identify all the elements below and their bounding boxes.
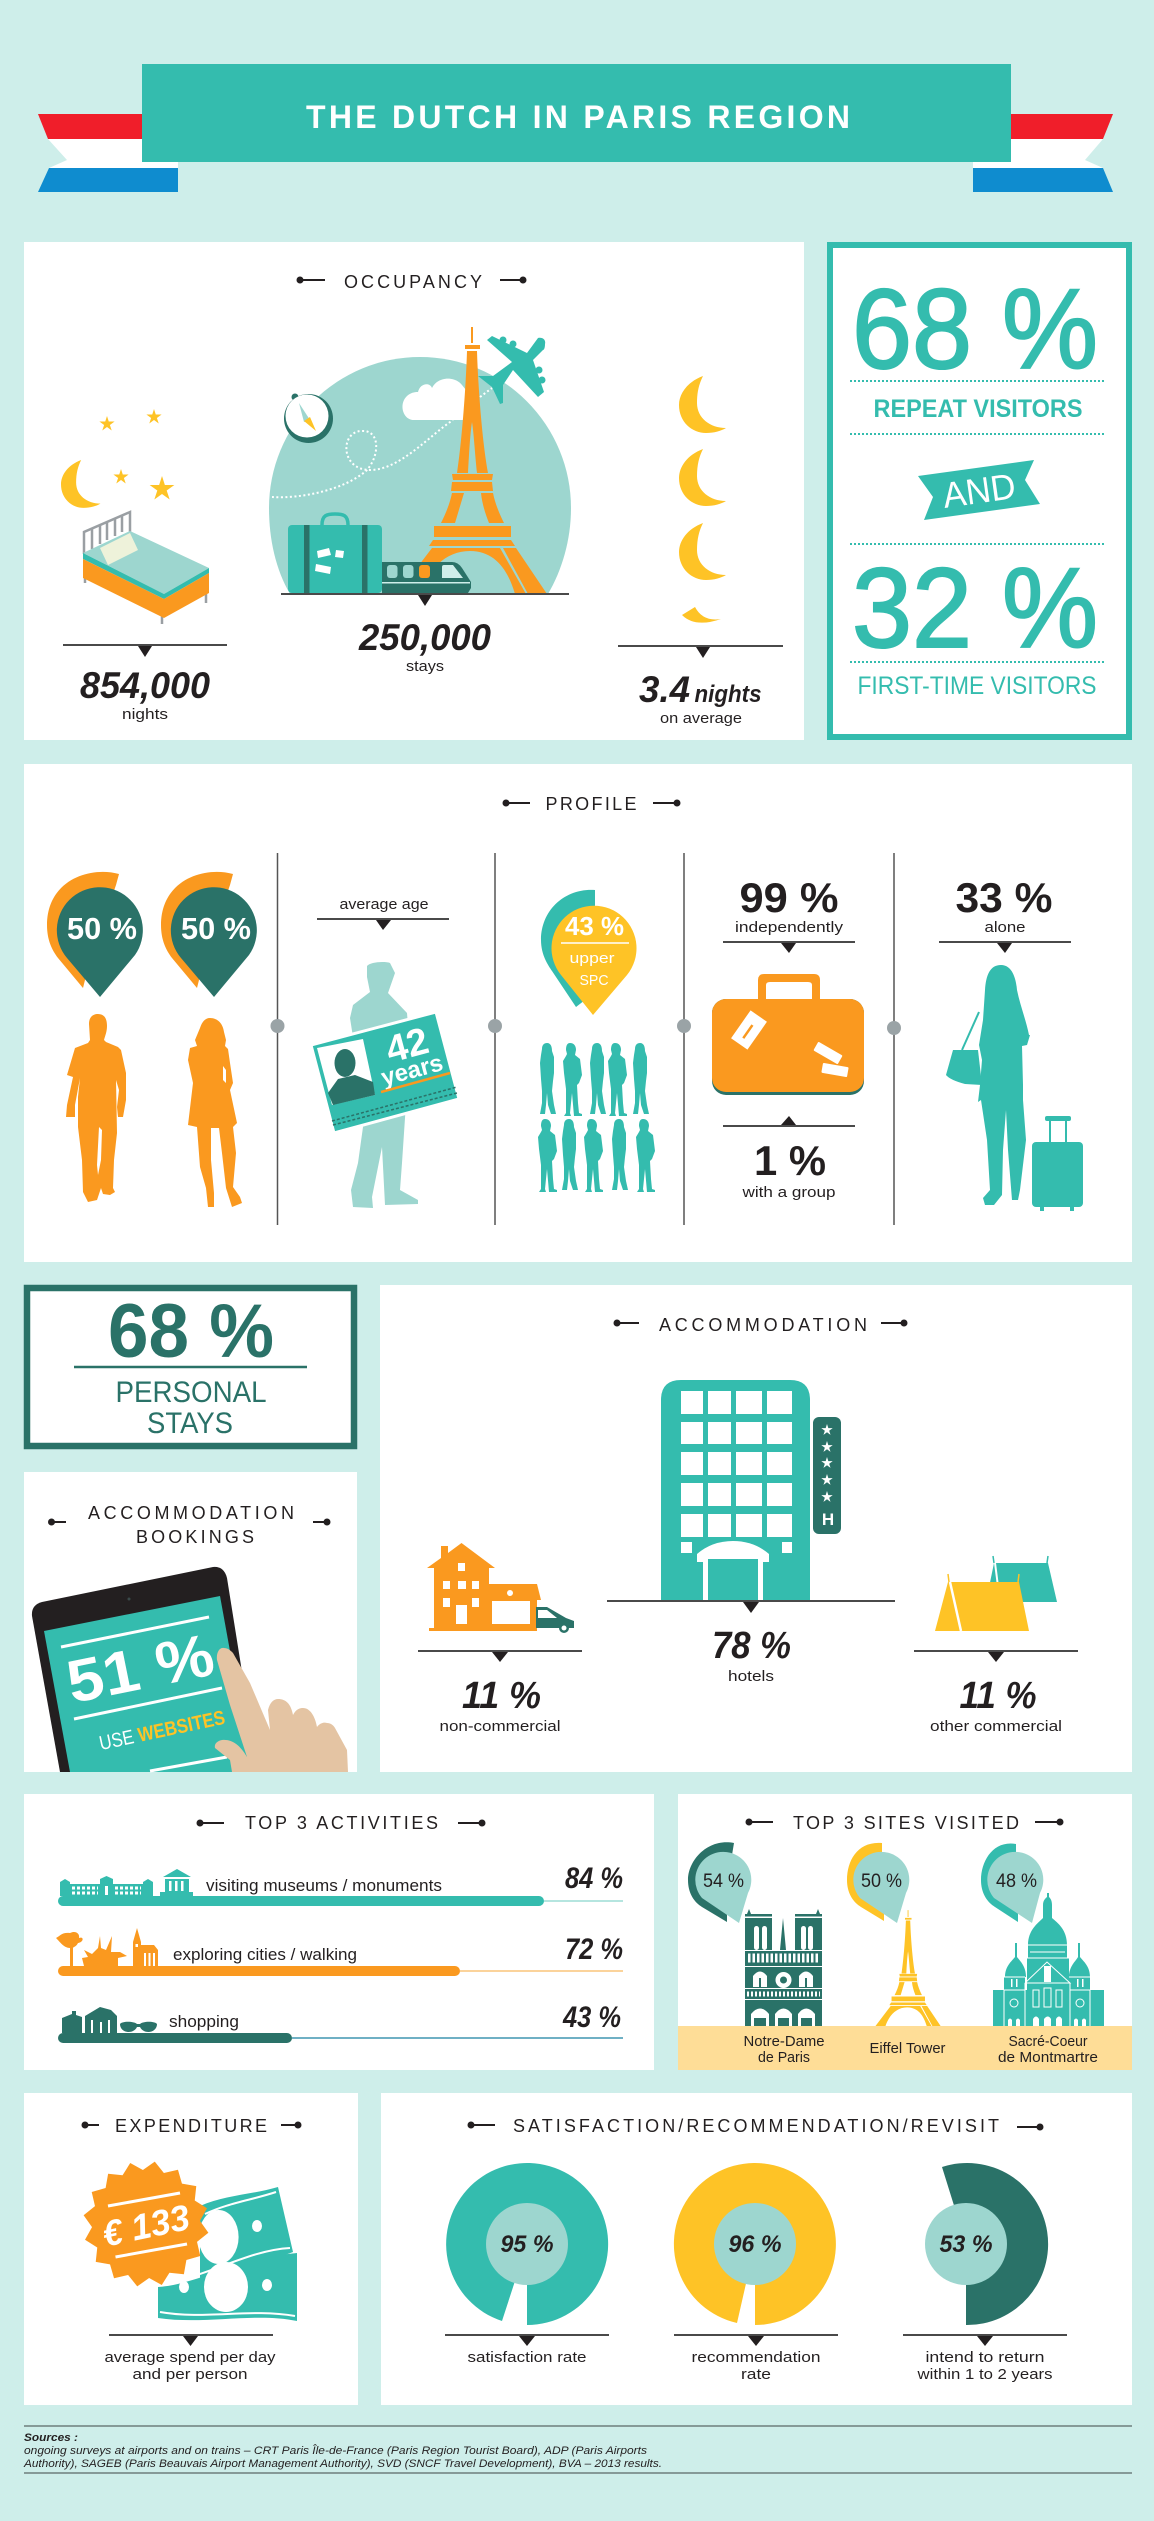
stat: 32 % first-time visitors: FIRST-TIME VISITORS bbox=[858, 672, 1096, 700]
pin: women 50 % bbox=[161, 872, 257, 997]
chart: intend to return 53 %: 53 % bbox=[940, 2231, 992, 2258]
icon: tents bbox=[935, 1555, 1057, 1631]
icon: tablet: USE WEBSITES bbox=[97, 1707, 227, 1755]
bar: shopping 43 %: shopping bbox=[169, 2012, 239, 2031]
pin: upper SPC 43 %: 43 % bbox=[565, 911, 624, 941]
site labels: Sacré-Coeur bbox=[1008, 2033, 1088, 2050]
stat: 78 % hotels: 78 % bbox=[712, 1625, 791, 1667]
chart: satisfaction rate 95 %: 95 % bbox=[500, 2231, 554, 2258]
title banner bbox=[38, 64, 1113, 192]
pin: upper SPC 43 %: SPC bbox=[580, 972, 609, 989]
panel: 68 % personal stays: STAYS bbox=[147, 1407, 233, 1440]
label: average spend: average spend per day bbox=[104, 2349, 276, 2366]
title text: THE DUTCH IN PARIS REGION bbox=[306, 99, 850, 135]
ribbon: and bbox=[918, 460, 1040, 520]
icon: museum and monument bbox=[60, 1869, 193, 1896]
stat: 78 % hotels: hotels bbox=[728, 1668, 774, 1685]
right flag ribbon bbox=[973, 114, 1113, 192]
icon: tablet bbox=[32, 1567, 258, 1772]
label: average spend: and per person bbox=[132, 2366, 248, 2383]
icon: shopping bag, gift and sunglasses bbox=[62, 2007, 157, 2033]
icon: plane bbox=[478, 336, 546, 404]
icon: tablet: 51 % bbox=[61, 1621, 219, 1716]
icon: hotel bbox=[661, 1380, 841, 1601]
stat: 11 % other commercial bbox=[914, 1651, 1078, 1735]
chart: satisfaction rate 95 %: satisfaction rate bbox=[468, 2349, 586, 2366]
chart: recommendation rate 96 % bbox=[674, 2163, 838, 2383]
stat: 3.4 nights on average bbox=[618, 646, 783, 727]
stat: 78 % hotels bbox=[607, 1601, 895, 1685]
icon: orange suitcase bbox=[712, 974, 864, 1095]
panel: top 3 activities bbox=[24, 1794, 654, 2070]
illustration: eiffel tower, plane, suitcase and train bbox=[269, 327, 571, 606]
bar: shopping 43 %: 43 % bbox=[562, 2001, 621, 2034]
chart: recommendation rate 96 %: 96 % bbox=[728, 2231, 782, 2258]
pin: men 50 % bbox=[47, 872, 143, 997]
left flag ribbon bbox=[38, 114, 180, 192]
icon: hotel: H bbox=[822, 1510, 834, 1529]
stat: 250,000 stays: 250,000 bbox=[358, 617, 491, 658]
column dividers bbox=[270, 853, 901, 1225]
sources footnote: ongoing surveys at airports and on trains – CRT Paris Île-de-France (Paris Region Tourist Board), ADP (Paris Airports bbox=[24, 2444, 648, 2457]
chart: recommendation rate 96 %: recommendation bbox=[692, 2349, 820, 2366]
stat: 99 % independently bbox=[723, 874, 855, 953]
pin: sacre-coeur 48 %: 48 % bbox=[996, 1871, 1037, 1892]
icon: hand pointing at tablet bbox=[215, 1648, 348, 1772]
stat: 3.4 nights on average: nights bbox=[694, 681, 762, 708]
stat: 3.4 nights on average: on average bbox=[660, 710, 742, 727]
stat: 11 % other commercial: other commercial bbox=[930, 1718, 1062, 1735]
bar: visiting museums / monuments 84 %: visiting museums / monuments bbox=[206, 1876, 442, 1895]
stat: 3.4 nights on average: 3.4 bbox=[639, 669, 690, 710]
icon: row of moons bbox=[679, 376, 726, 623]
icon: group of people bbox=[538, 1043, 655, 1192]
stat: 11 % non-commercial: non-commercial bbox=[440, 1718, 560, 1735]
icon: woman with bag and trolley bbox=[946, 965, 1083, 1211]
stat: 1 % with a group: 1 % bbox=[754, 1137, 826, 1184]
stat: 68 % repeat visitors: REPEAT VISITORS bbox=[874, 395, 1082, 423]
bar: exploring cities / walking 72 % bbox=[56, 1928, 623, 1976]
icon: moon and stars bbox=[61, 409, 174, 508]
heading: accommodation: ACCOMMODATION bbox=[659, 1315, 867, 1335]
stat: 99 % independently: independently bbox=[735, 919, 844, 936]
bar: exploring cities / walking 72 %: exploring cities / walking bbox=[173, 1945, 357, 1964]
icon: person with age sign bbox=[311, 962, 459, 1208]
heading: profile bbox=[504, 794, 680, 814]
pin: upper SPC 43 %: upper bbox=[570, 950, 614, 967]
heading: occupancy: OCCUPANCY bbox=[344, 272, 482, 292]
panel: occupancy bbox=[24, 242, 804, 740]
pin: women 50 %: 50 % bbox=[181, 911, 251, 946]
stat: 854,000 nights: nights bbox=[122, 706, 168, 723]
pin: men 50 %: 50 % bbox=[67, 911, 137, 946]
icon: train bbox=[382, 562, 471, 593]
stat: 250,000 stays bbox=[358, 617, 491, 675]
sources footnote: Authority), SAGEB (Paris Beauvais Airport Management Authority), SVD (SNCF Travel Development), BVA – 2013 results. bbox=[23, 2458, 662, 2470]
chart: intend to return 53 % bbox=[903, 2163, 1067, 2383]
stat: 250,000 stays: stays bbox=[406, 658, 444, 675]
stat: 33 % alone bbox=[939, 874, 1071, 953]
badge: 133 euros: € 133 bbox=[99, 2196, 193, 2255]
panel: 68 % personal stays: PERSONAL bbox=[116, 1376, 266, 1409]
average age label bbox=[317, 896, 449, 930]
chart: intend to return 53 %: intend to return bbox=[926, 2349, 1044, 2366]
stat: 11 % other commercial: 11 % bbox=[960, 1675, 1036, 1717]
panel: accommodation bookings bbox=[24, 1472, 357, 1772]
stat: 1 % with a group bbox=[723, 1116, 855, 1201]
stat: 33 % alone: alone bbox=[984, 919, 1026, 936]
bar: shopping 43 % bbox=[58, 2001, 623, 2043]
panel: expenditure bbox=[24, 2093, 358, 2405]
heading: accommodation bookings bbox=[49, 1503, 330, 1547]
icon: sacre-coeur bbox=[993, 1893, 1104, 2026]
site labels: de Montmartre bbox=[998, 2049, 1098, 2066]
site labels: de Paris bbox=[758, 2049, 810, 2066]
icon: tree, grass and church bbox=[56, 1928, 158, 1966]
heading: profile: PROFILE bbox=[546, 794, 636, 814]
icon: person with age sign: 42 bbox=[381, 1020, 433, 1072]
stat: 854,000 nights bbox=[63, 645, 227, 723]
pin: sacre-coeur 48 % bbox=[981, 1843, 1043, 1923]
pin: notre-dame 54 %: 54 % bbox=[703, 1871, 744, 1892]
panel: 68 % personal stays: 68 % bbox=[108, 1289, 274, 1374]
sources footnote bbox=[23, 2426, 1132, 2473]
stat: 33 % alone: 33 % bbox=[956, 874, 1052, 921]
pin: eiffel tower 50 %: 50 % bbox=[861, 1871, 902, 1892]
heading: top 3 sites visited: TOP 3 SITES VISITED bbox=[793, 1813, 1019, 1833]
site labels: Eiffel Tower bbox=[870, 2040, 946, 2057]
panel: top 3 sites visited bbox=[678, 1794, 1132, 2070]
bar: visiting museums / monuments 84 % bbox=[58, 1862, 623, 1906]
panel: profile bbox=[24, 764, 1132, 1262]
icon: house and car bbox=[427, 1543, 574, 1633]
stat: 11 % non-commercial bbox=[418, 1651, 582, 1735]
sources footnote: Sources : bbox=[24, 2432, 78, 2444]
icon: eiffel tower bbox=[397, 327, 547, 594]
stat: 32 % first-time visitors: 32 % bbox=[852, 545, 1098, 671]
ribbon: and: AND bbox=[940, 465, 1018, 516]
heading: satisfaction recommendation revisit: SATISFACTION/RECOMMENDATION/REVISIT bbox=[513, 2116, 999, 2136]
average age label: average age bbox=[340, 896, 428, 913]
stat: 99 % independently: 99 % bbox=[740, 874, 838, 921]
site labels: Notre-Dame bbox=[744, 2033, 824, 2050]
heading: top 3 activities bbox=[198, 1813, 484, 1833]
heading: top 3 activities: TOP 3 ACTIVITIES bbox=[245, 1813, 438, 1833]
chart: intend to return 53 %: within 1 to 2 years bbox=[916, 2366, 1052, 2383]
heading: accommodation bookings: BOOKINGS bbox=[136, 1527, 254, 1547]
chart: satisfaction rate 95 % bbox=[445, 2163, 609, 2366]
pin: upper SPC 43 % bbox=[541, 890, 636, 1015]
stat: 11 % non-commercial: 11 % bbox=[462, 1675, 541, 1717]
icon: compass bbox=[284, 394, 333, 443]
heading: accommodation bookings: ACCOMMODATION bbox=[88, 1503, 294, 1523]
label: average spend bbox=[104, 2335, 276, 2383]
icon: banknotes bbox=[158, 2187, 297, 2321]
icon: man silhouette bbox=[66, 1014, 126, 1202]
icon: eiffel tower yellow bbox=[875, 1910, 941, 2026]
icon: woman silhouette bbox=[188, 1018, 242, 1207]
site labels bbox=[744, 2033, 1098, 2066]
pin: notre-dame 54 % bbox=[688, 1842, 751, 1923]
panel: satisfaction, recommendation, revisit bbox=[381, 2093, 1132, 2405]
panel: 68 % personal stays bbox=[27, 1288, 354, 1446]
panel: accommodation bbox=[380, 1285, 1132, 1772]
bar: exploring cities / walking 72 %: 72 % bbox=[565, 1933, 623, 1966]
pin: eiffel tower 50 % bbox=[847, 1843, 909, 1923]
icon: suitcase bbox=[288, 514, 382, 593]
panel: repeat and first-time visitors bbox=[830, 245, 1129, 737]
badge: 133 euros bbox=[75, 2153, 217, 2295]
icon: person with age sign: years bbox=[378, 1049, 446, 1092]
stat: 68 % repeat visitors: 68 % bbox=[852, 266, 1098, 392]
bar: visiting museums / monuments 84 %: 84 % bbox=[565, 1862, 623, 1895]
heading: occupancy bbox=[298, 272, 526, 292]
heading: expenditure: EXPENDITURE bbox=[115, 2116, 267, 2136]
heading: expenditure bbox=[82, 2116, 300, 2136]
stat: 1 % with a group: with a group bbox=[741, 1184, 836, 1201]
stat: 854,000 nights: 854,000 bbox=[80, 665, 210, 706]
chart: recommendation rate 96 %: rate bbox=[741, 2366, 771, 2383]
icon: bed bbox=[83, 512, 209, 624]
icon: notre-dame bbox=[745, 1909, 822, 2026]
